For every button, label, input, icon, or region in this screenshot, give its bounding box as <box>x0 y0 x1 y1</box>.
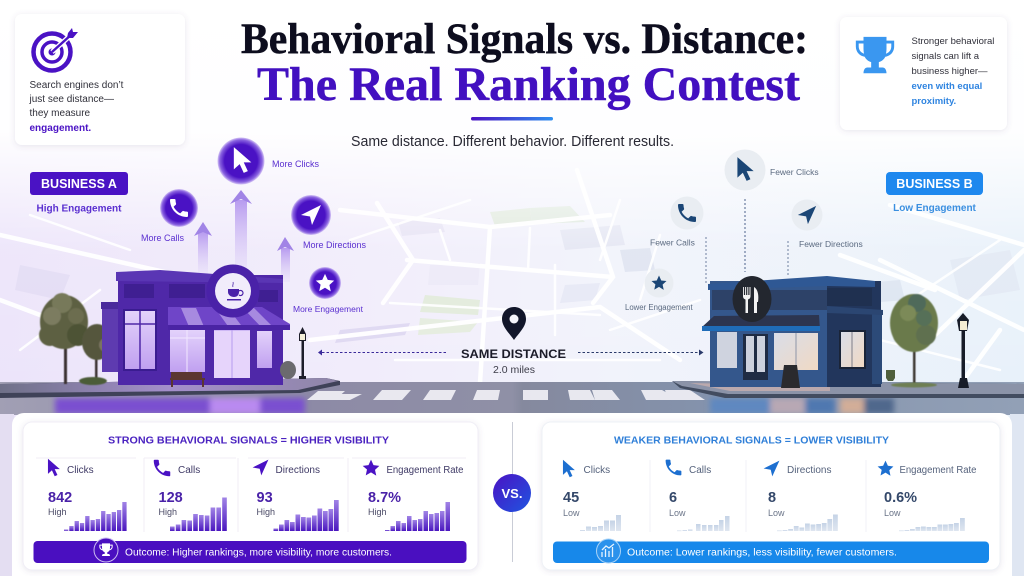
icon: more clicks <box>218 138 264 184</box>
metric: engagement A: High <box>368 507 387 517</box>
crosswalk <box>307 390 705 400</box>
label: more calls: More Calls <box>141 233 185 243</box>
street map backdrop <box>0 170 1024 385</box>
metric: directions B <box>764 461 838 531</box>
icon: target <box>34 28 78 70</box>
icon: more directions <box>291 195 331 235</box>
metric: engagement B <box>878 461 977 531</box>
metric: calls A: Calls <box>178 465 200 476</box>
building B <box>702 276 895 388</box>
metric: calls B: Low <box>669 508 686 518</box>
VS badge <box>493 474 531 512</box>
icon: fewer clicks <box>724 150 766 190</box>
tree B <box>890 294 938 388</box>
top fade <box>0 0 1024 400</box>
metric: engagement B: 0.6% <box>884 490 917 506</box>
metric: clicks A: Clicks <box>67 465 94 476</box>
metric: calls A: 128 <box>158 490 183 506</box>
callout: equal proximity <box>840 17 1007 130</box>
callout text: Stronger behavioral <box>912 36 994 47</box>
icon: fewer directions <box>792 200 822 230</box>
tagline: Same distance. Different behavior. Different results. <box>351 134 674 150</box>
metric: directions B: 8 <box>768 490 776 506</box>
metric: engagement A <box>363 460 464 531</box>
outcome bar A: Outcome: Higher rankings, more visibility, more customers. <box>125 548 392 558</box>
bench <box>170 372 205 387</box>
panel heading A: STRONG BEHAVIORAL SIGNALS = HIGHER VISIBILITY <box>108 434 389 446</box>
icon: location pin <box>502 307 526 340</box>
awning <box>702 315 820 331</box>
title underline <box>471 117 553 120</box>
divider <box>512 422 514 562</box>
badge: business A: BUSINESS A <box>41 177 117 191</box>
badge: business B <box>886 172 983 214</box>
metric: directions A: 93 <box>256 490 273 506</box>
badge: business A: High Engagement <box>36 204 122 214</box>
title: Behavioral Signals vs. Distance: <box>241 16 808 63</box>
metric: calls B: Calls <box>689 465 711 476</box>
metric: engagement B: Low <box>884 508 901 518</box>
badge: business B: BUSINESS B <box>896 177 973 191</box>
metric: clicks B: 45 <box>563 490 579 506</box>
icon: fewer calls <box>670 196 704 230</box>
callout text: just see distance— <box>28 94 114 105</box>
label: more engagement: More Engagement <box>293 304 364 314</box>
signal arrows A <box>194 190 294 282</box>
metric: engagement B: Engagement Rate <box>900 465 977 476</box>
metric: clicks A: High <box>48 507 67 517</box>
metric: calls A: High <box>158 507 177 517</box>
sidewalk B <box>672 381 1024 398</box>
same distance label: 2.0 miles <box>493 364 535 376</box>
metric: clicks A: 842 <box>48 490 72 506</box>
outcome bar B: Outcome: Lower rankings, less visibility, fewer customers. <box>627 548 897 558</box>
panel: business A stats <box>23 422 478 570</box>
label: more directions: More Directions <box>303 240 367 250</box>
lamp B <box>957 313 969 388</box>
metric: calls A <box>154 460 227 531</box>
title <box>241 16 808 111</box>
tree A2 <box>79 324 113 385</box>
metric: clicks B <box>563 460 621 531</box>
metric: directions A <box>253 460 339 531</box>
label: fewer directions: Fewer Directions <box>799 239 863 249</box>
building A <box>101 264 296 387</box>
callout text: business higher— <box>912 66 988 77</box>
metric: engagement A: Engagement Rate <box>386 465 464 476</box>
metric: clicks A <box>48 459 127 531</box>
VS badge: VS. <box>502 486 522 501</box>
sandwich board <box>781 365 800 388</box>
title: The Real Ranking Contest <box>257 58 800 111</box>
callout text: even with equal <box>912 81 982 92</box>
callout: search engines <box>15 14 185 145</box>
outcome bar A <box>34 538 466 563</box>
icon: lower engagement <box>644 268 674 298</box>
arrow: distance left <box>318 350 448 356</box>
callout text: they measure <box>30 108 91 119</box>
label: fewer calls: Fewer Calls <box>650 238 695 248</box>
metric: directions A: Directions <box>276 465 320 476</box>
metric: directions A: High <box>256 507 275 517</box>
icon: more engagement <box>309 267 341 299</box>
sign <box>732 276 772 322</box>
metric: directions B: Low <box>768 508 785 518</box>
panel: business B stats <box>542 422 1000 570</box>
lamp A <box>299 327 306 379</box>
signal lines B <box>706 199 788 285</box>
callout text: Search engines don’t <box>30 80 124 91</box>
same distance label: SAME DISTANCE <box>461 347 566 361</box>
callout text: proximity. <box>912 96 956 107</box>
same distance label <box>461 347 566 376</box>
badge: business A <box>30 172 128 214</box>
tree A1 <box>39 293 89 384</box>
badge: business B: Low Engagement <box>893 203 977 214</box>
callout text: engagement. <box>30 123 91 134</box>
sign <box>206 264 260 318</box>
metric: calls B: 6 <box>669 490 677 506</box>
metric: clicks B: Low <box>563 508 580 518</box>
outcome bar B <box>553 539 989 563</box>
comparison panel <box>0 413 1024 576</box>
metric: clicks B: Clicks <box>584 465 610 476</box>
road <box>0 382 1024 415</box>
label: fewer clicks: Fewer Clicks <box>770 167 819 177</box>
icon: outcome chart <box>596 539 620 563</box>
sidewalk A <box>0 378 340 398</box>
label: lower engagement: Lower Engagement <box>625 303 693 312</box>
panel heading B: WEAKER BEHAVIORAL SIGNALS = LOWER VISIBILITY <box>614 434 889 446</box>
label: more clicks: More Clicks <box>272 159 320 169</box>
awning <box>168 307 290 330</box>
metric: directions B: Directions <box>787 465 831 476</box>
icon: trophy <box>856 37 894 73</box>
callout text: signals can lift a <box>912 51 980 62</box>
metric: calls B <box>666 460 730 531</box>
metric: engagement A: 8.7% <box>368 490 401 506</box>
icon: outcome trophy <box>94 538 118 562</box>
icon: more calls <box>160 189 198 227</box>
arrow: distance right <box>578 350 704 356</box>
